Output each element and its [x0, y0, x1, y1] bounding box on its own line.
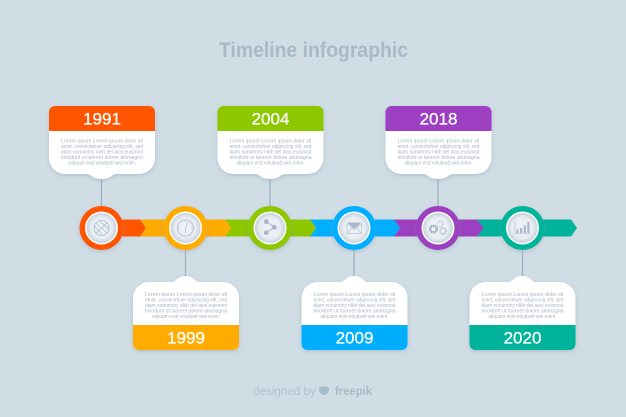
icon: freepik logo [319, 386, 329, 395]
body text [482, 292, 564, 320]
body text: amet, consectetuer adipiscing elit, sed [314, 298, 396, 304]
footer credit: freepik [335, 386, 373, 398]
card: 2018 [386, 106, 492, 179]
body text: Lorem ipsum Lorem ipsum dolor sit [314, 292, 396, 298]
icon: globe [94, 220, 109, 236]
body text: aliquam erat volutpatt wisi enim. [404, 160, 472, 166]
footer credit [253, 386, 373, 398]
body text: aliquam erat volutpatt wisi enim. [68, 160, 136, 166]
title: Timeline infographic [219, 39, 408, 62]
body text: Lorem ipsum Lorem ipsum dolor sit [398, 138, 480, 144]
node: share [248, 206, 292, 250]
body text: diam nonummy nibh del aios euismod [230, 150, 312, 156]
icon: clock [178, 220, 194, 236]
connector lines [102, 178, 522, 278]
body text: aliquam erat volutpatt wisi enim. [152, 314, 220, 320]
body text: tincidunt ut laoreet dolore alomagna [145, 308, 227, 314]
year header 2004: 2004 [252, 110, 289, 128]
body text: aliquam erat volutpatt wisi enim. [320, 314, 388, 320]
node: bar chart [500, 206, 544, 250]
icon: bar chart [515, 221, 530, 234]
card: 1999 [133, 276, 239, 350]
body text [314, 292, 396, 320]
body text: tincidunt ut laoreet dolore alomagna [482, 308, 564, 314]
body text: amet, consectetuer adipiscing elit, sed [230, 144, 312, 150]
body text [145, 292, 228, 320]
body text [398, 138, 480, 166]
card: 2004 [218, 106, 324, 179]
body text [230, 138, 312, 166]
timeline arrow [101, 220, 577, 236]
body text: Lorem ipsum Lorem ipsum dolor sit [145, 292, 228, 298]
body text: amet, consectetuer adipiscing elit, sed [145, 298, 227, 304]
body text: aliquam erat volutpatt wisi enim. [236, 160, 304, 166]
icon: envelope [347, 222, 362, 234]
body text: amet, consectetuer adipiscing elit, sed [398, 144, 480, 150]
year footer 2020: 2020 [504, 328, 541, 348]
year footer 1999: 1999 [167, 328, 205, 348]
icon: share [264, 220, 276, 235]
body text: amet, consectetuer adipiscing elit, sed [61, 144, 143, 150]
body text: tincidunt ut laoreet dolore alomagna [61, 155, 143, 161]
node: gears [416, 206, 460, 250]
body text: Lorem ipsum Lorem ipsum dolor sit [482, 292, 564, 298]
body text: aliquam erat volutpatt wisi enim. [488, 314, 556, 320]
body text: Lorem ipsum Lorem ipsum dolor sit [230, 138, 312, 144]
body text [61, 138, 144, 166]
body text: tincidunt ut laoreet dolore alomagna [314, 308, 396, 314]
card: 2020 [470, 276, 576, 350]
year footer 2009: 2009 [336, 328, 373, 348]
body text: diam nonummy nibh del aios euismod [398, 150, 480, 156]
body text: amet, consectetuer adipiscing elit, sed [482, 298, 564, 304]
body text: diam nonummy nibh del aios euismod [314, 303, 396, 309]
node: clock [164, 206, 208, 250]
icon: gears [430, 221, 446, 234]
year header 2018: 2018 [420, 110, 457, 128]
footer credit: designed by [253, 386, 316, 398]
body text: tincidunt ut laoreet dolore alomagna [230, 155, 312, 161]
body text: diam nonummy nibh del aios euismod [61, 150, 143, 156]
body text: tincidunt ut laoreet dolore alomagna [398, 155, 480, 161]
node: globe [80, 206, 124, 250]
year header 1991: 1991 [83, 110, 121, 128]
body text: diam nonummy nibh del aios euismod [145, 303, 227, 309]
card: 2009 [302, 276, 408, 350]
card: 1991 [49, 106, 155, 179]
body text: Lorem ipsum Lorem ipsum dolor sit [61, 138, 144, 144]
body text: diam nonummy nibh del aios euismod [482, 303, 564, 309]
node: mail [332, 206, 376, 250]
